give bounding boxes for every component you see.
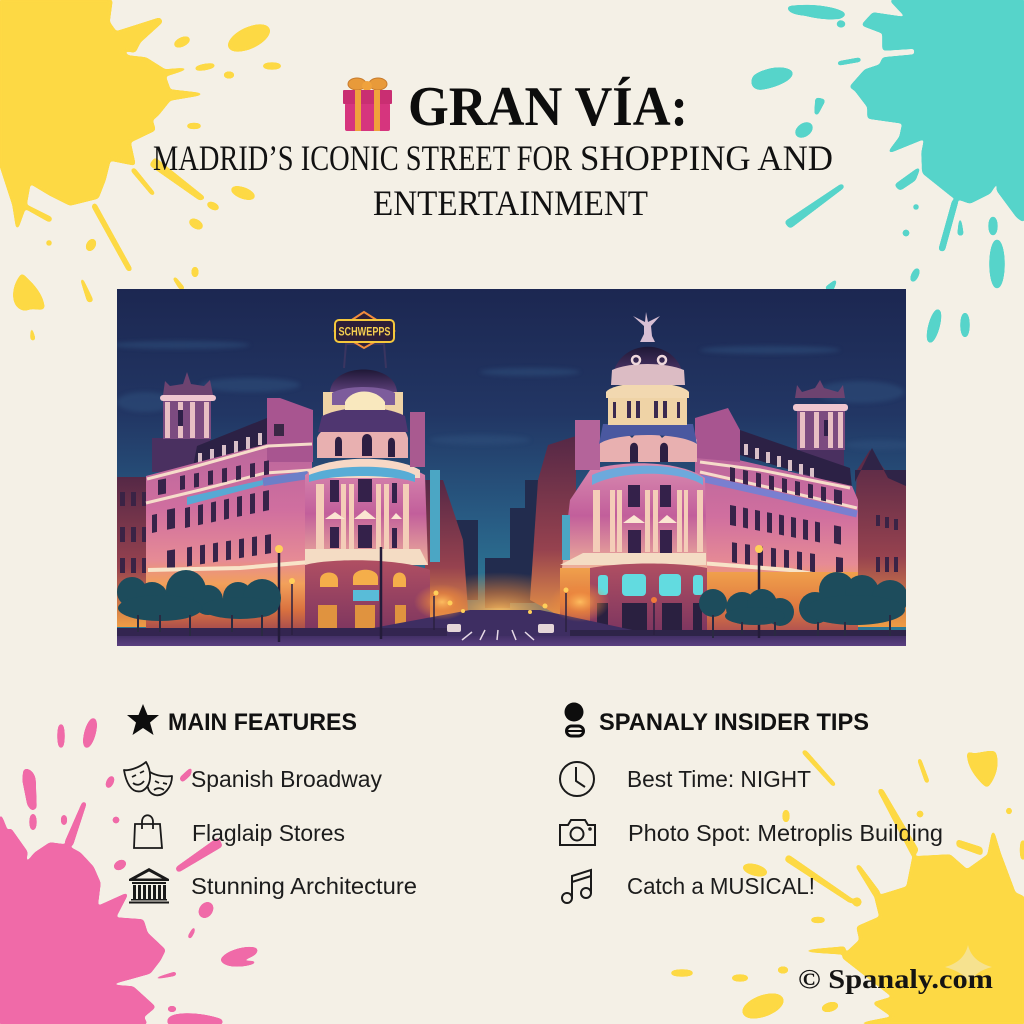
tower: [152, 372, 216, 472]
subtitle: ENTERTAINMENT: [373, 183, 648, 223]
illustration: Gran Vía at night: [110, 289, 915, 652]
heading: Gran Vía: GRAN VÍA:: [408, 76, 688, 138]
text: Stunning Architecture: Stunning Architecture: [191, 873, 417, 899]
rotunda ground floor: [560, 568, 590, 621]
blue vertical sign: [562, 515, 570, 560]
cornice lines: [147, 444, 312, 479]
winged statue: [633, 312, 660, 342]
icon: shopping bag: [134, 815, 162, 848]
trees left: [117, 570, 281, 636]
text: photo spot: Photo Spot: Metroplis Building: [628, 820, 943, 846]
paint splat: pink bottom left: [0, 717, 257, 1024]
street lights: [275, 545, 763, 642]
heading: main features: MAIN FEATURES: [168, 709, 357, 736]
icon: gift: [343, 78, 392, 131]
roof and dormers: [740, 430, 852, 488]
rotunda ground floor: [305, 560, 430, 634]
wing windows: [730, 467, 843, 578]
text: catch a musical: Catch a MUSICAL!: [627, 873, 815, 899]
paint splat: yellow bottom right: [671, 750, 1024, 1024]
trees right: [699, 572, 908, 638]
night sky: [117, 289, 906, 646]
wing windows: [152, 460, 271, 570]
upper arcade: [600, 435, 697, 462]
right neighbour buildings: [530, 436, 906, 627]
icon: temple: [129, 868, 169, 904]
street glow: [465, 574, 554, 614]
subtitle: MADRID’S ICONIC STREET FOR: [153, 138, 572, 178]
credit: Spanaly.com: © Spanaly.com: [798, 964, 994, 994]
icon: person: [564, 702, 584, 736]
dome: [323, 392, 403, 416]
right building: [560, 312, 858, 640]
neon sign: [335, 312, 394, 368]
rotunda: [560, 312, 858, 640]
paint splat: teal top right: [752, 0, 1024, 344]
panel: insider tips: [560, 702, 943, 903]
icon: clock: [560, 762, 594, 796]
subtitle: SHOPPING AND: [580, 138, 833, 178]
text: best time: Best Time: NIGHT: [627, 766, 811, 792]
text: Spanish Broadway: Spanish Broadway: [191, 766, 382, 792]
text: Flaglaip Stores: Flaglaip Stores: [192, 820, 345, 846]
road: [117, 610, 906, 646]
icon: theatre masks: [124, 762, 172, 795]
sparkle watermark: [945, 945, 992, 984]
left building: Metropolis style: [146, 312, 440, 640]
title: [153, 76, 833, 223]
wing facade: [146, 440, 312, 640]
rotunda: [305, 370, 430, 634]
paint splat: yellow top left: [0, 0, 281, 340]
blue vertical sign: [430, 470, 440, 562]
distant towers: [455, 480, 545, 608]
subtitle: [153, 138, 833, 223]
icon: star: [127, 704, 159, 735]
heading: insider tips: SPANALY INSIDER TIPS: [599, 709, 869, 736]
neon sign: SCHWEPPS: [338, 324, 390, 338]
tower: [793, 380, 848, 482]
left neighbour buildings: [117, 477, 468, 627]
roof and dormers: [194, 418, 267, 464]
upper arcade: [317, 432, 408, 458]
dome: [599, 424, 697, 444]
wing facade: [695, 458, 858, 572]
panel: main features: [124, 704, 417, 904]
icon: camera: [560, 820, 595, 845]
icon: music notes: [562, 870, 591, 903]
